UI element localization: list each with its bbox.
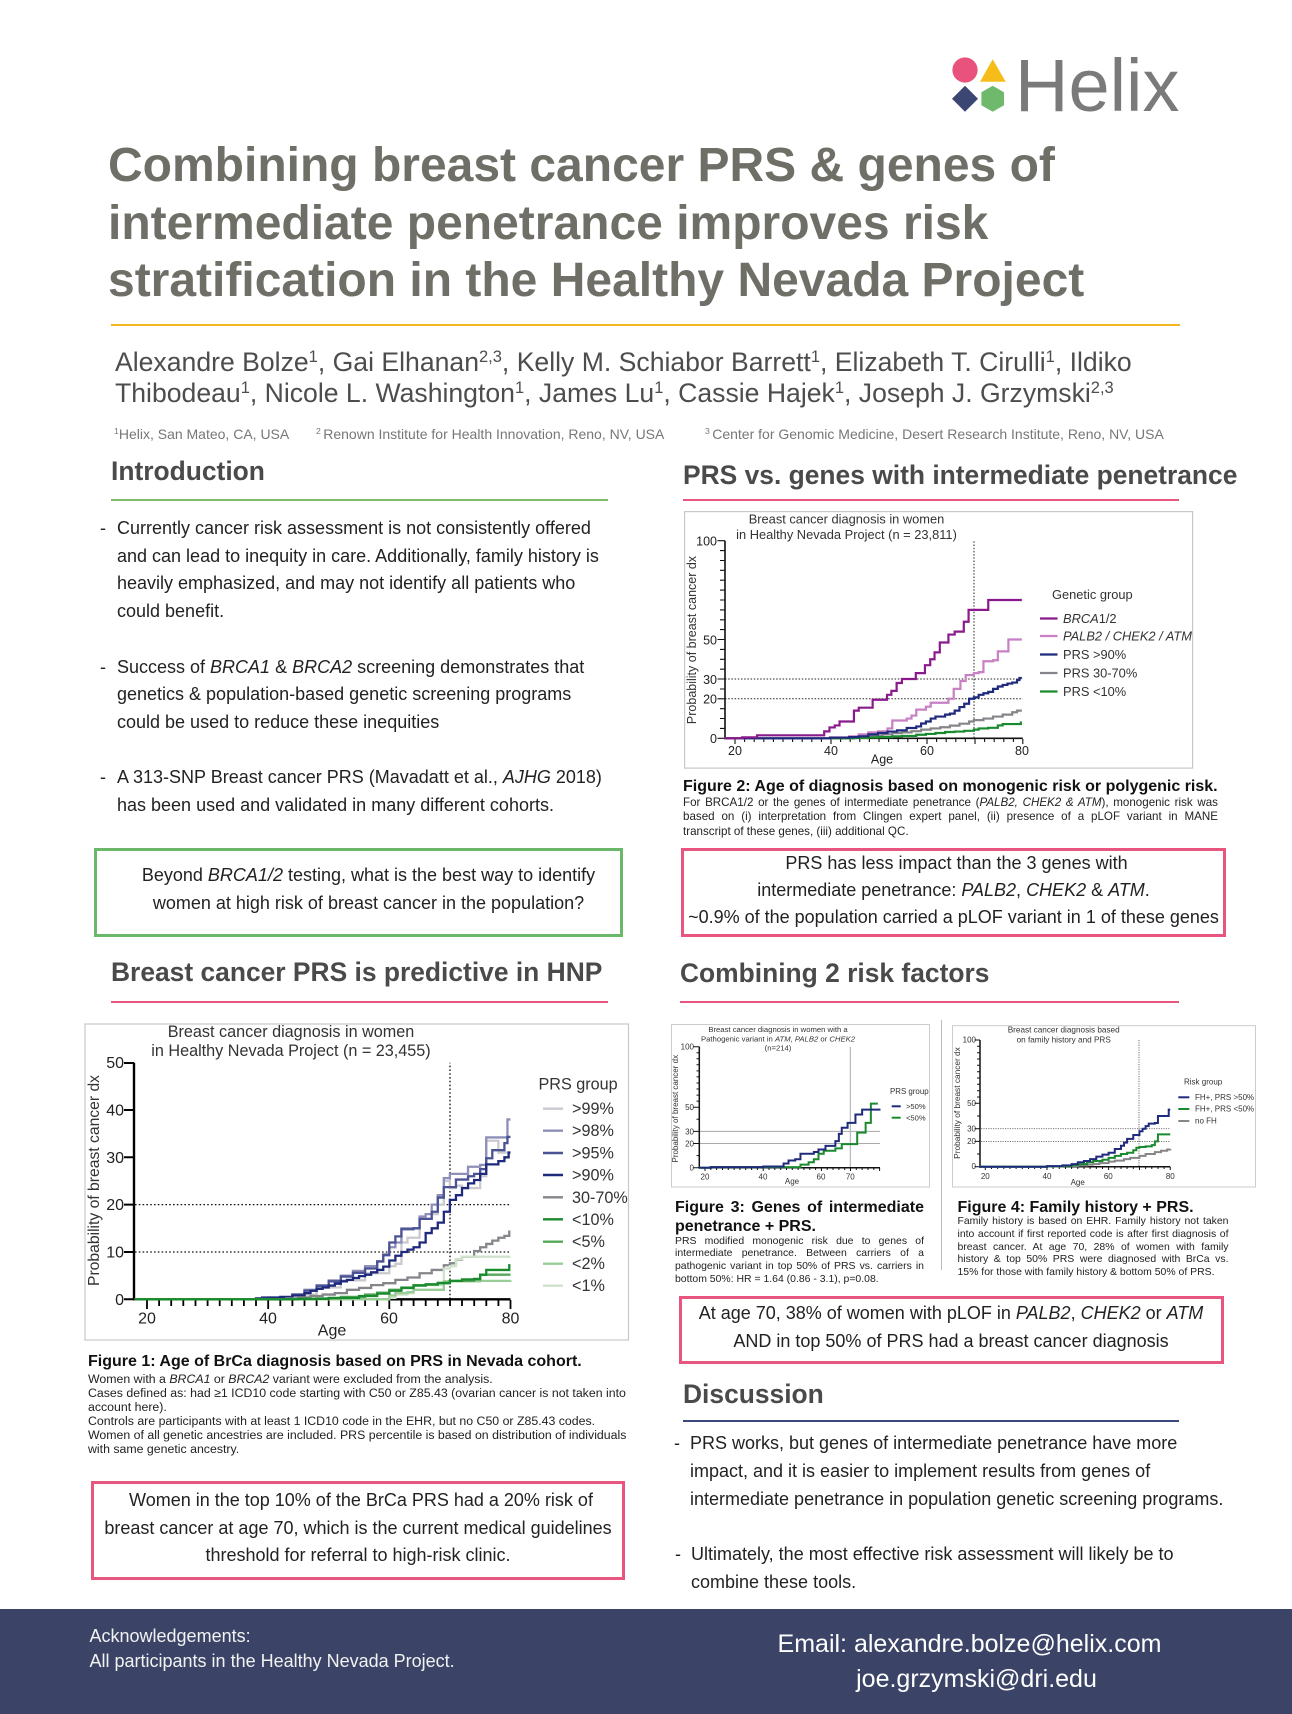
panel: introduction bullets (100, 518, 602, 815)
callout: age 70 38 percent: AND in top 50% of PRS had a breast cancer diagnosis (733, 1331, 1169, 1351)
chart: figure 1: 20 (138, 1310, 156, 1328)
heading: Breast cancer PRS is predictive in HNP: Breast cancer PRS is predictive in HNP (111, 957, 602, 987)
caption body: For BRCA1/2 or the genes of intermediate penetrance (PALB2, CHEK2 & ATM), monogenic risk was (683, 796, 1218, 809)
legend: >98% (572, 1122, 614, 1140)
caption heading: Figure 4: Family history + PRS. (958, 1199, 1194, 1216)
caption body: based on (i) interpretation from Clingen expert panel, (ii) presence of a pLOF variant in MANE (683, 810, 1218, 823)
callout: age 70 38 percent: At age 70, 38% of women with pLOF in PALB2, CHEK2 or ATM (699, 1303, 1203, 1323)
caption body: transcript of these genes, (iii) additional QC. (683, 825, 909, 838)
chart: figure 4: 30 (967, 1124, 977, 1134)
chart: figure 4: 40 (1043, 1172, 1052, 1181)
title (108, 139, 1084, 307)
heading: Introduction: Introduction (111, 456, 265, 486)
chart: figure 2: 60 (920, 744, 934, 758)
legend: PRS <10% (1063, 684, 1126, 699)
figure 1 caption (88, 1353, 626, 1456)
callout: age 70 38 percent (678, 1296, 1224, 1364)
legend: <50% (906, 1113, 926, 1122)
panel: discussion bullets: impact, and it is easier to implement results from genes of (690, 1461, 1150, 1481)
bullet 1 (674, 1433, 1223, 1509)
title: intermediate penetrance improves risk (108, 196, 988, 250)
authors: Alexandre Bolze1, Gai Elhanan2,3, Kelly M. Schiabor Barrett1, Elizabeth T. Cirulli1, Ildiko (115, 347, 1132, 377)
chart: figure 3: 100 (681, 1042, 695, 1052)
chart: figure 4: on family history and PRS (1017, 1036, 1111, 1045)
curves (724, 600, 1022, 738)
callout: top 10 percent: Women in the top 10% of the BrCa PRS had a 20% risk of (129, 1490, 593, 1510)
caption body: bottom 50%: HR = 1.64 (0.86 - 3.1), p=0.08. (675, 1274, 879, 1285)
panel: discussion bullets (674, 1433, 1223, 1592)
legend: >50% (906, 1102, 926, 1111)
legend: <5% (572, 1233, 605, 1251)
panel: introduction bullets: and can lead to inequity in care. Additionally, family history is (117, 546, 599, 566)
legend: >95% (572, 1144, 614, 1162)
chart: figure 1: in Healthy Nevada Project (n = 23,455) (151, 1042, 431, 1060)
chart: figure 2: 50 (703, 633, 717, 647)
chart: figure 3: 70 (846, 1172, 855, 1182)
legend: <2% (572, 1255, 605, 1273)
panel: introduction bullets: - (100, 656, 106, 676)
caption body: Controls are participants with at least 1 ICD10 code in the EHR, but no C50 or Z85.43 codes. (88, 1414, 595, 1428)
chart: figure 3: Probability of breast cancer dx (671, 1055, 680, 1163)
legend: 30-70% (572, 1189, 628, 1207)
caption body: Women with a BRCA1 or BRCA2 variant were excluded from the analysis. (88, 1372, 493, 1386)
chart: figure 1: 20 (106, 1197, 124, 1214)
caption body: Family history is based on EHR. Family history not taken (958, 1216, 1228, 1227)
panel: discussion bullets: combine these tools. (691, 1572, 856, 1592)
panel: discussion bullets: - (674, 1433, 680, 1453)
title: stratification in the Healthy Nevada Project (108, 254, 1084, 307)
callout: PRS less impact (681, 848, 1226, 937)
panel: introduction bullets: Success of BRCA1 & BRCA2 screening demonstrates that (117, 656, 584, 676)
panel: introduction bullets: Currently cancer risk assessment is not consistently offered (117, 518, 591, 538)
legend: PRS group (890, 1087, 929, 1096)
affiliations: 3 Center for Genomic Medicine, Desert Research Institute, Reno, NV, USA (705, 426, 1164, 442)
authors (115, 347, 1132, 408)
caption heading (675, 1199, 924, 1235)
chart: figure 3: 60 (817, 1172, 826, 1182)
caption heading: Figure 2: Age of diagnosis based on monogenic risk or polygenic risk. (683, 778, 1218, 795)
authors: Thibodeau1, Nicole L. Washington1, James Lu1, Cassie Hajek1, Joseph J. Grzymski2,3 (115, 378, 1114, 408)
chart: figure 4: Breast cancer diagnosis based (1008, 1026, 1120, 1035)
caption body: history & top 50% PRS were diagnosed with BrCa vs. (958, 1254, 1228, 1265)
axes (718, 541, 1023, 744)
heading: Combining 2 risk factors: Combining 2 risk factors (680, 958, 989, 988)
panel: introduction bullets: could be used to reduce these inequities (117, 712, 439, 732)
chart: figure 4: 80 (1166, 1172, 1175, 1181)
panel: introduction bullets: - (100, 518, 106, 538)
chart: figure 2: 80 (1015, 744, 1029, 758)
contact emails: Email: alexandre.bolze@helix.com (778, 1630, 1161, 1658)
caption heading: penetrance + PRS. (675, 1218, 816, 1235)
callout: PRS less impact: ~0.9% of the population carried a pLOF variant in 1 of these genes (688, 907, 1219, 927)
chart: figure 3: 50 (685, 1103, 695, 1112)
chart: figure 2: 30 (703, 673, 717, 687)
bullet 2 (675, 1544, 1174, 1592)
chart: figure 4: 20 (967, 1137, 977, 1146)
chart: figure 4: 50 (967, 1099, 977, 1108)
panel: discussion bullets: intermediate penetrance in population genetic screening programs. (690, 1489, 1223, 1509)
legend: <10% (572, 1211, 614, 1229)
legend: no FH (1195, 1117, 1217, 1126)
callout: top 10 percent (91, 1481, 625, 1580)
caption body: Cases defined as: had ≥1 ICD10 code starting with C50 or Z85.43 (ovarian cancer is not taken into (88, 1386, 626, 1400)
chart: figure 3: Pathogenic variant in ATM, PALB2 or CHEK2 (701, 1034, 856, 1043)
legend: <1% (572, 1277, 605, 1295)
panel: discussion bullets: Ultimately, the most effective risk assessment will likely be to (691, 1544, 1174, 1564)
axes (974, 1040, 1170, 1170)
callout: PRS less impact: PRS has less impact than the 3 genes with (785, 852, 1128, 872)
chart: figure 2: Probability of breast cancer dx (685, 555, 699, 724)
divider (941, 1020, 942, 1270)
chart: figure 1: Breast cancer diagnosis in women (168, 1023, 414, 1041)
chart: figure 2: in Healthy Nevada Project (n = 23,811) (736, 527, 957, 542)
acknowledgements (90, 1626, 455, 1671)
chart: figure 1: 50 (106, 1055, 124, 1072)
reference lines (135, 1063, 510, 1299)
panel: introduction bullets: heavily emphasized, and may not identify all patients who (117, 573, 575, 593)
chart: figure 1: 40 (259, 1310, 277, 1328)
curves (699, 1104, 880, 1168)
callout: research question: women at high risk of breast cancer in the population? (153, 892, 584, 912)
caption body: into account if first reported code is after first diagnosis of (958, 1229, 1228, 1240)
chart: figure 4: Probability of breast cancer dx (952, 1046, 962, 1159)
callout: top 10 percent: breast cancer at age 70, which is the current medical guidelines (104, 1518, 612, 1538)
contact emails: joe.grzymski@dri.edu (856, 1665, 1097, 1693)
chart: figure 2: 40 (824, 744, 838, 758)
chart: figure 2: 20 (728, 744, 742, 758)
legend (1040, 587, 1192, 699)
chart: figure 1: 30 (106, 1150, 124, 1167)
figure 3 caption (675, 1199, 924, 1285)
contact emails (778, 1630, 1161, 1693)
chart: figure 3 (671, 1024, 930, 1188)
chart: figure 4: 20 (981, 1172, 990, 1181)
chart: figure 1 (84, 1023, 630, 1341)
caption body (683, 796, 1218, 838)
survival curves (135, 1119, 510, 1299)
axes (694, 1047, 880, 1171)
chart: figure 2: 100 (696, 534, 717, 548)
legend: FH+, PRS <50% (1195, 1105, 1254, 1114)
legend: PRS group (538, 1076, 618, 1094)
legend: PRS >90% (1063, 647, 1126, 662)
curves (979, 1110, 1170, 1167)
chart: figure 1: Probability of breast cancer dx (86, 1075, 103, 1286)
reference lines (981, 1040, 1170, 1166)
callout: research question (94, 848, 623, 937)
chart: figure 3: Age (785, 1177, 800, 1186)
reference lines (700, 1047, 880, 1167)
panel: introduction bullets: has been used and validated in many different cohorts. (117, 794, 554, 814)
caption body: 15% for those with family history & bottom 50% of PRS. (958, 1267, 1214, 1278)
caption body: account here). (88, 1400, 167, 1414)
caption body: with same genetic ancestry. (88, 1442, 239, 1456)
heading: Discussion: Discussion (683, 1379, 824, 1409)
panel: discussion bullets: PRS works, but genes of intermediate penetrance have more (690, 1433, 1177, 1453)
affiliations: 1Helix, San Mateo, CA, USA (114, 426, 289, 442)
caption body (88, 1372, 626, 1456)
legend: PALB2 / CHEK2 / ATM (1063, 628, 1192, 644)
heading: PRS vs. genes with intermediate penetrance: PRS vs. genes with intermediate penetrance (683, 460, 1237, 490)
chart: figure 1: Age (318, 1322, 346, 1340)
chart: figure 4: 60 (1104, 1172, 1113, 1181)
chart: figure 3: Breast cancer diagnosis in women with a (708, 1025, 848, 1034)
legend (538, 1076, 628, 1295)
chart: figure 1: 0 (115, 1292, 124, 1309)
panel: introduction bullets: could benefit. (117, 600, 224, 620)
caption body: pathogenic variant in top 50% of PRS vs. carriers in (675, 1261, 924, 1272)
chart: figure 3: 20 (701, 1172, 710, 1182)
caption body: breast cancer. At age 70, 28% of women with family (958, 1242, 1228, 1253)
legend (890, 1087, 929, 1122)
affiliations: 2 Renown Institute for Health Innovation, Reno, NV, USA (316, 426, 664, 442)
caption body: PRS modified monogenic risk due to genes of (675, 1236, 924, 1246)
bullet 3 (100, 767, 602, 815)
legend: PRS 30-70% (1063, 666, 1137, 680)
caption body: Women of all genetic ancestries are included. PRS percentile is based on distribution of individuals (88, 1428, 626, 1442)
legend: FH+, PRS >50% (1195, 1093, 1254, 1102)
chart: figure 1: 10 (106, 1244, 124, 1262)
panel: introduction bullets: - (100, 767, 106, 787)
chart: figure 3: 20 (685, 1140, 695, 1148)
chart: figure 4 (952, 1025, 1256, 1188)
bullet 1 (100, 518, 599, 620)
caption body: intermediate penetrance. Between carriers of a (675, 1248, 924, 1259)
chart: figure 4: Age (1071, 1178, 1085, 1187)
legend: >90% (572, 1166, 614, 1184)
acknowledgements: Acknowledgements: (90, 1626, 251, 1646)
legend: Genetic group (1052, 587, 1133, 602)
caption body (958, 1216, 1229, 1278)
caption body (675, 1236, 924, 1285)
chart: figure 2 (684, 511, 1194, 769)
caption heading: Figure 3: Genes of intermediate (675, 1199, 924, 1216)
panel: discussion bullets: - (675, 1544, 681, 1564)
title: Combining breast cancer PRS & genes of (108, 139, 1055, 192)
chart: figure 1: 40 (106, 1102, 124, 1120)
chart: figure 3: (n=214) (765, 1044, 792, 1053)
legend: BRCA1/2 (1063, 611, 1117, 626)
chart: figure 1: 80 (502, 1310, 520, 1328)
panel: introduction bullets: A 313-SNP Breast cancer PRS (Mavadatt et al., AJHG 2018) (117, 767, 602, 787)
bullet 2 (100, 656, 584, 732)
affiliations (114, 426, 1164, 442)
axes (124, 1063, 510, 1309)
chart: figure 2: 20 (703, 692, 717, 706)
callout: PRS less impact: intermediate penetrance: PALB2, CHEK2 & ATM. (757, 880, 1150, 900)
chart: figure 1: 60 (380, 1310, 398, 1328)
panel: introduction bullets: genetics & population-based genetic screening programs (117, 684, 571, 704)
footer band (0, 1609, 1292, 1714)
figure 2 caption (683, 778, 1218, 838)
legend (1178, 1078, 1254, 1126)
chart: figure 2: Age (871, 752, 893, 766)
chart: figure 4: 0 (972, 1162, 977, 1171)
callout: research question: Beyond BRCA1/2 testing, what is the best way to identify (142, 865, 595, 885)
reference lines (725, 541, 1023, 738)
caption heading: Figure 1: Age of BrCa diagnosis based on PRS in Nevada cohort. (88, 1353, 582, 1370)
chart: figure 3: 40 (759, 1172, 768, 1182)
chart: figure 3: 0 (690, 1164, 695, 1172)
legend: Risk group (1184, 1078, 1223, 1086)
figure 4 caption (958, 1199, 1229, 1278)
acknowledgements: All participants in the Healthy Nevada Project. (90, 1650, 455, 1670)
chart: figure 4: 100 (963, 1036, 977, 1045)
callout: top 10 percent: threshold for referral to high-risk clinic. (205, 1545, 511, 1565)
legend: >99% (572, 1100, 614, 1118)
chart: figure 3: 30 (685, 1128, 695, 1136)
chart: figure 2: 0 (710, 732, 717, 746)
chart: figure 2: Breast cancer diagnosis in women (749, 512, 944, 526)
